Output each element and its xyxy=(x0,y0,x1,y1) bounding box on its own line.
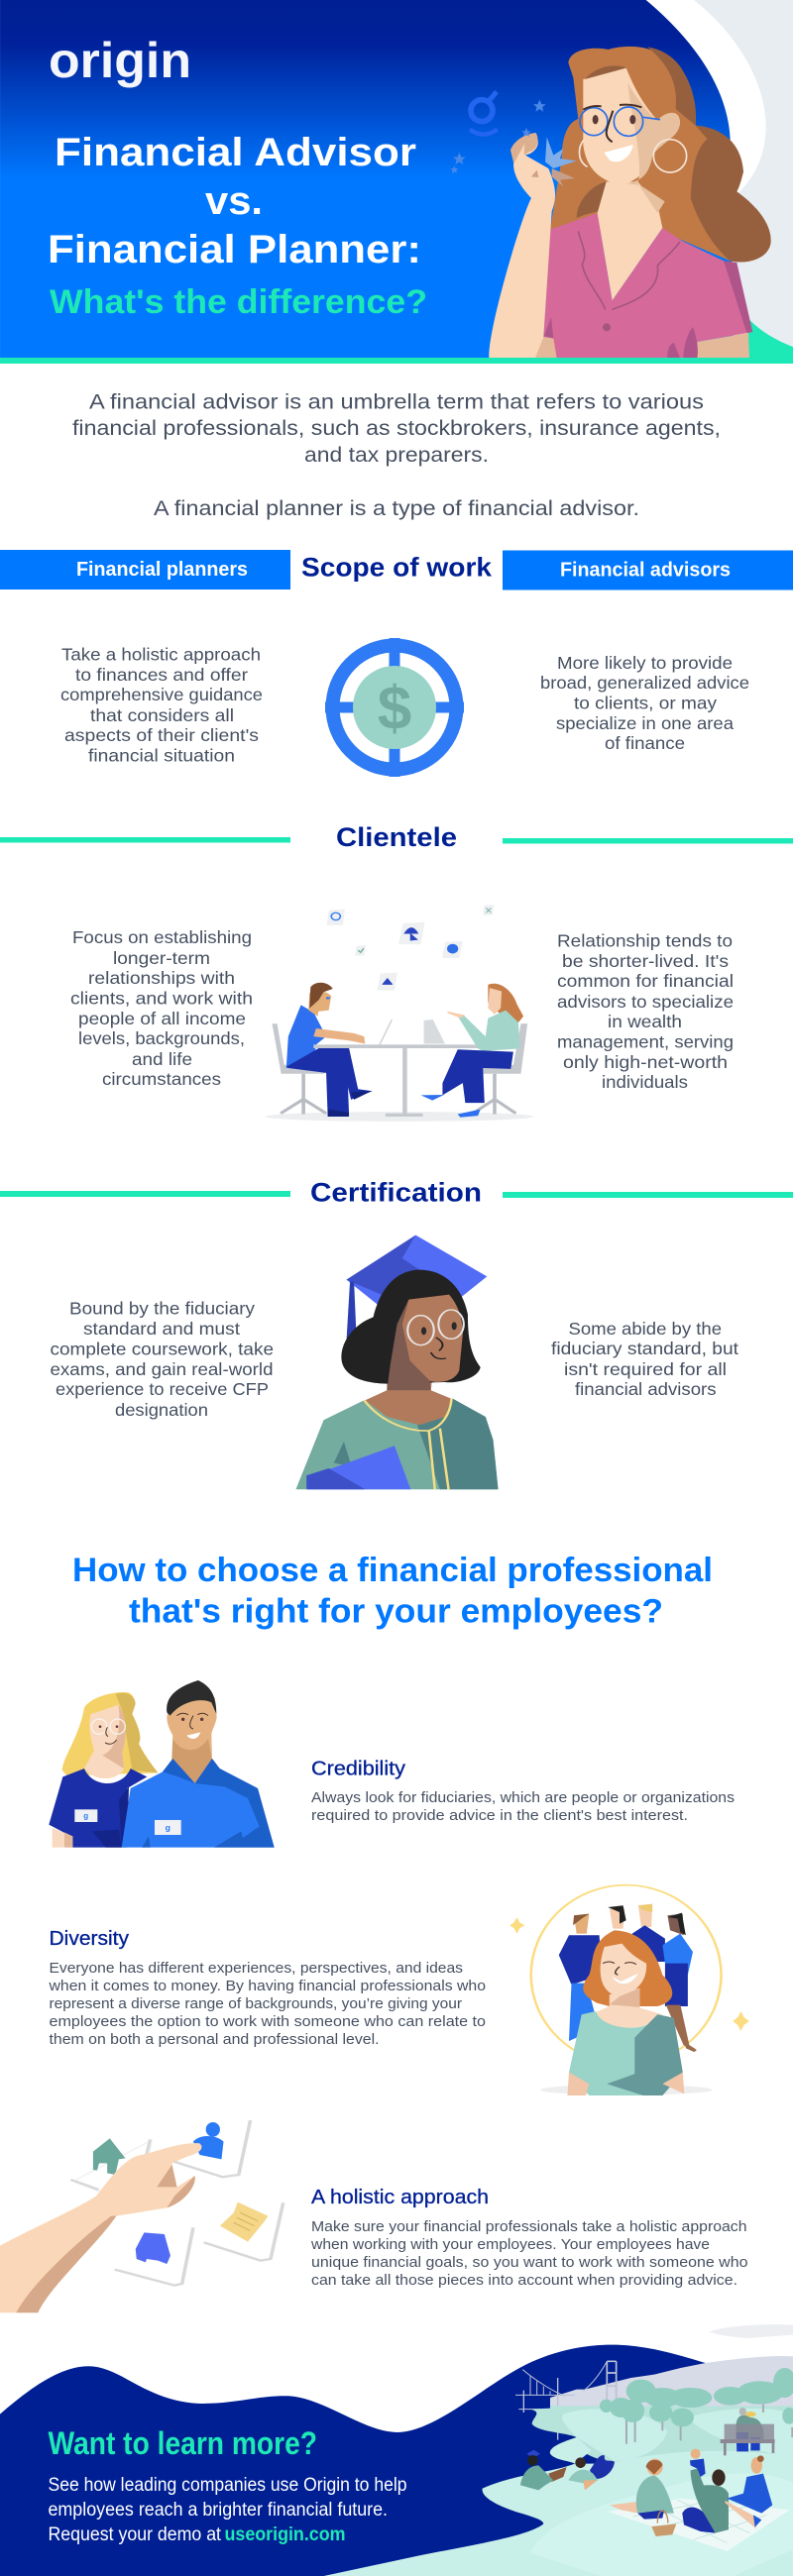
text: diversity: Diversity xyxy=(50,1928,129,1950)
woman xyxy=(420,984,527,1118)
illustration: two employees: g xyxy=(83,1811,88,1820)
panel: clientele xyxy=(0,822,793,1122)
panel: scope of work xyxy=(0,550,793,777)
intro text: and tax preparers. xyxy=(304,444,489,467)
column header: financial planners: Financial planners xyxy=(76,559,248,581)
text: credibility: Credibility xyxy=(311,1759,405,1780)
illustration: park landscape xyxy=(324,2324,793,2576)
text: diversity: them on both a personal and professional level. xyxy=(50,2031,379,2048)
text: planners scope xyxy=(60,644,263,765)
text: advisors clientele: advisors to specialize xyxy=(557,992,734,1012)
column header: financial planners xyxy=(0,550,290,590)
bridge xyxy=(515,2361,617,2440)
text: call to action: Request your demo at xyxy=(48,2524,222,2545)
text: holistic approach: Make sure your financial professionals take a holistic approach xyxy=(311,2218,747,2235)
illustration: graduate with glasses xyxy=(295,1235,499,1489)
text: planners clientele: and life xyxy=(132,1049,192,1069)
heading: how to choose xyxy=(72,1552,713,1631)
text: advisors certification: Some abide by the xyxy=(569,1319,722,1339)
text: diversity: employees the option to work with someone who can relate to xyxy=(50,2013,486,2030)
text: advisors scope xyxy=(540,653,749,753)
text: advisors scope: of finance xyxy=(605,733,685,753)
heading: clientele: Clientele xyxy=(336,822,457,852)
floating cards xyxy=(327,905,494,991)
text: diversity xyxy=(48,1928,486,2048)
column header: financial advisors xyxy=(503,551,793,590)
footer call to action xyxy=(0,2324,793,2576)
text: diversity: represent a diverse range of backgrounds, you’re giving your xyxy=(50,1995,462,2012)
text: advisors scope: specialize in one area xyxy=(556,713,734,733)
title: Financial Planner: xyxy=(48,228,421,271)
text: planners clientele: Focus on establishing xyxy=(72,927,252,947)
intro text: financial professionals, such as stockbrokers, insurance agents, xyxy=(72,417,721,440)
text: advisors scope: broad, generalized advice xyxy=(540,673,749,693)
text: advisors clientele: individuals xyxy=(602,1072,688,1092)
text: advisors clientele: only high-net-worth xyxy=(563,1052,728,1072)
heading: how to choose: How to choose a financial professional xyxy=(72,1552,713,1589)
people on grass xyxy=(520,2449,790,2551)
text: advisors clientele: in wealth xyxy=(608,1012,682,1031)
text: advisors clientele: management, serving xyxy=(557,1032,734,1052)
text: planners scope: financial situation xyxy=(88,745,235,765)
text: planners certification: designation xyxy=(115,1400,208,1420)
text: credibility xyxy=(311,1759,735,1824)
text: planners clientele xyxy=(70,927,253,1089)
text: want to learn more: Want to learn more? xyxy=(48,2425,317,2461)
text: advisors clientele: common for financial xyxy=(557,971,734,991)
illustration: two people at a desk xyxy=(266,905,533,1122)
intro text: A financial advisor is an umbrella term that refers to various xyxy=(89,390,704,414)
illustration: two employees xyxy=(49,1680,275,1848)
text: advisors scope: to clients, or may xyxy=(574,694,717,713)
logo: origin: origin xyxy=(49,33,191,88)
text: planners clientele: people of all income xyxy=(78,1009,246,1028)
text: planners certification: complete coursework, take xyxy=(50,1340,274,1359)
text: advisors scope: More likely to provide xyxy=(557,653,733,673)
text: credibility: required to provide advice in the client's best interest. xyxy=(311,1807,688,1824)
text: planners clientele: circumstances xyxy=(102,1069,221,1089)
text: planners clientele: relationships with xyxy=(88,968,235,988)
text: planners certification: exams, and gain real-world xyxy=(50,1359,274,1379)
text: call to action: useorigin.com xyxy=(224,2524,345,2545)
text: diversity: when it comes to money. By having financial professionals who xyxy=(48,1978,486,1994)
trees xyxy=(600,2368,793,2444)
title: What's the difference? xyxy=(50,283,427,321)
heading: certification: Certification xyxy=(310,1177,482,1207)
text: advisors certification: financial advisors xyxy=(575,1379,717,1399)
text: advisors certification xyxy=(551,1319,738,1399)
bench couple xyxy=(721,2408,775,2455)
navy wave xyxy=(0,2345,706,2576)
panel: certification xyxy=(0,1177,793,1489)
text: advisors certification: isn't required for all xyxy=(564,1359,727,1379)
hero background xyxy=(0,0,793,358)
text: planners certification: Bound by the fiduciary xyxy=(69,1299,255,1319)
illustration: diverse team in a circle xyxy=(510,1885,749,2095)
illustration: hand and cards xyxy=(0,2120,283,2312)
text: planners clientele: clients, and work with xyxy=(70,989,253,1009)
text: call to action: See how leading companies use Origin to help xyxy=(48,2475,406,2496)
text: advisors clientele xyxy=(557,931,734,1092)
text: planners certification xyxy=(50,1299,274,1420)
text: holistic approach xyxy=(310,2187,747,2289)
text: planners scope: aspects of their client's xyxy=(64,725,259,745)
text: advisors clientele: be shorter-lived. It's xyxy=(562,951,729,971)
illustration: woman with glasses xyxy=(489,47,771,358)
icon: dollar target: $ xyxy=(378,675,411,743)
text: holistic approach: unique financial goals, so you want to work with someone who xyxy=(311,2254,747,2271)
panel: diversity xyxy=(48,1885,749,2095)
icon: dollar target xyxy=(325,638,464,777)
text: planners scope: that considers all xyxy=(90,705,234,725)
intro text xyxy=(72,390,721,520)
text: planners certification: standard and must xyxy=(83,1319,240,1339)
man xyxy=(272,983,392,1117)
title: Financial Advisor xyxy=(55,131,416,174)
text: planners scope: Take a holistic approach xyxy=(61,644,261,664)
text: planners clientele: levels, backgrounds, xyxy=(78,1028,245,1048)
text: advisors clientele: Relationship tends to xyxy=(557,931,733,951)
city skyline xyxy=(550,2356,793,2411)
background people xyxy=(559,1904,696,2051)
teal strip xyxy=(0,358,793,364)
column header: financial advisors: Financial advisors xyxy=(560,559,731,581)
text: diversity: Everyone has different experiences, perspectives, and ideas xyxy=(50,1960,463,1977)
text: holistic approach: can take all those pieces into account when providing advice. xyxy=(311,2272,737,2289)
text: planners scope: to finances and offer xyxy=(75,665,248,685)
text: advisors certification: fiduciary standard, but xyxy=(551,1339,738,1358)
title: vs. xyxy=(205,179,263,223)
text: holistic approach: A holistic approach xyxy=(311,2187,489,2208)
panel: credibility xyxy=(49,1680,735,1848)
icon: stars and g logo xyxy=(450,92,546,173)
panel: a holistic approach xyxy=(0,2120,747,2312)
title xyxy=(48,131,427,321)
text: holistic approach: when working with your employees. Your employees have xyxy=(310,2236,710,2253)
grass xyxy=(530,2406,793,2490)
text: planners scope: comprehensive guidance xyxy=(60,685,263,704)
desk xyxy=(313,1044,486,1117)
intro text: A financial planner is a type of financial advisor. xyxy=(154,497,639,520)
text: call to action: employees reach a brighter financial future. xyxy=(48,2500,388,2521)
text: planners clientele: longer-term xyxy=(113,948,210,968)
hero banner xyxy=(0,0,793,364)
heading: scope of work: Scope of work xyxy=(301,553,493,583)
text: call to action xyxy=(48,2475,406,2545)
illustration: two employees: g xyxy=(166,1822,170,1832)
front woman xyxy=(567,1930,684,2095)
text: credibility: Always look for fiduciaries, which are people or organizations xyxy=(311,1789,735,1806)
heading: how to choose: that's right for your employees? xyxy=(129,1593,663,1631)
text: planners certification: experience to receive CFP xyxy=(56,1379,269,1399)
